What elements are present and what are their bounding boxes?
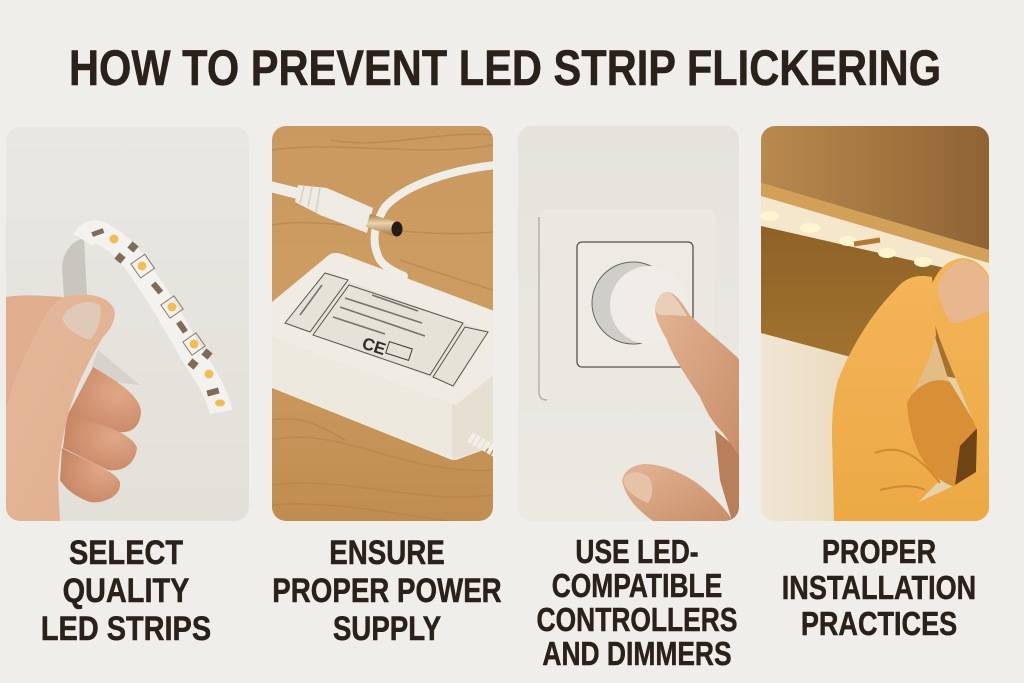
label: proper installation: INSTALLATION [782,569,976,606]
label: ensure proper power supply: PROPER POWER [272,572,502,610]
label plate [285,273,488,386]
label: select quality: QUALITY [63,572,189,610]
icon: hand pressing strip [832,258,992,521]
panel: ensure proper power supply [272,126,493,521]
label: use LED-compatible controllers: AND DIMMERS [542,635,732,672]
icon: dimmer switch [538,217,694,401]
label: ensure proper power supply: ENSURE [329,534,445,572]
label: select quality: SELECT [69,534,183,572]
label: use LED-compatible controllers: CONTROLLERS [537,601,737,638]
label: select quality [41,534,211,648]
label: ensure proper power supply: SUPPLY [333,610,441,648]
icon: coiled cable [470,437,496,452]
label: ensure proper power supply [272,534,502,648]
label: proper installation [782,533,976,642]
icon: power supply box [272,253,497,460]
icon: lit LED strip [761,196,989,278]
icon: DC plug [295,185,402,237]
panel: LED-compatible controllers [518,126,739,521]
panel: proper installation practices [761,126,989,521]
label: use LED-compatible controllers: USE LED- [575,533,699,570]
icon: LED strip [62,228,225,412]
icon: fingers [622,292,745,521]
icon: hand [6,294,141,521]
label: use LED-compatible controllers: COMPATIBLE [552,567,722,604]
icon: cables [268,165,496,276]
label: use LED-compatible controllers [537,533,737,672]
title: HOW TO PREVENT LED STRIP FLICKERING [69,40,941,96]
label: select quality: LED STRIPS [41,610,211,648]
label plate: CE [360,334,388,359]
panel: select quality LED strips [6,129,249,521]
label: proper installation: PROPER [822,533,936,570]
label: proper installation: PRACTICES [801,605,957,642]
